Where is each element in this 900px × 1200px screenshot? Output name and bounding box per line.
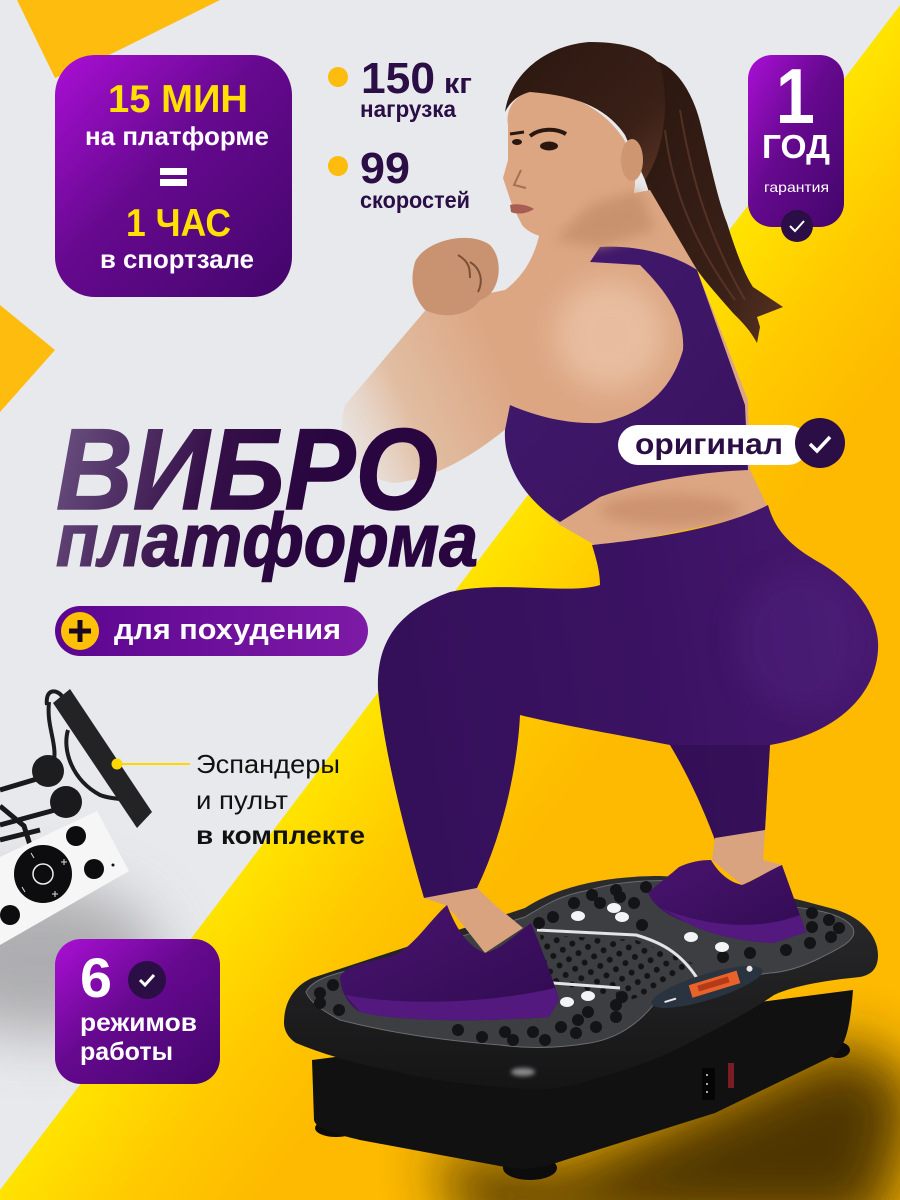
card: 15 min equals 1 hour: в спортзале — [100, 244, 254, 274]
card: 6 work modes — [55, 939, 220, 1084]
control display — [648, 958, 766, 1016]
stat: 99 speeds — [328, 144, 470, 213]
neck shadow — [555, 190, 655, 247]
lower back shading — [600, 494, 740, 526]
card: 6 work modes: работы — [80, 1038, 173, 1066]
accessories: expander and remote — [0, 689, 152, 945]
glute highlight — [754, 602, 826, 684]
head and face — [503, 92, 635, 244]
white stripes — [537, 930, 697, 988]
stat: 150 kg load: 150 — [361, 54, 435, 103]
woman — [340, 42, 878, 1020]
original label: оригинал — [635, 428, 783, 461]
platform base — [312, 990, 853, 1169]
icon: seal check — [781, 210, 813, 242]
stat: 150 kg load — [328, 54, 472, 122]
stat: 99 speeds: 99 — [360, 144, 410, 193]
card: 15 min equals 1 hour: 1 ЧАС — [126, 202, 231, 245]
face features — [510, 130, 566, 214]
callout: expanders and remote included: Эспандеры — [196, 749, 340, 779]
icon: plus — [61, 612, 99, 650]
fist — [412, 238, 499, 315]
ear — [621, 139, 643, 181]
white massage balls — [560, 903, 729, 1007]
icon: white remote control — [0, 811, 129, 945]
ponytail — [645, 60, 783, 343]
left shoe — [340, 905, 559, 1020]
platform rim — [284, 876, 878, 1089]
warranty badge: 1 — [776, 52, 813, 140]
warranty badge: гарантия — [764, 179, 829, 195]
platform feet — [315, 1042, 850, 1180]
callout: expanders and remote included: в комплекте — [196, 822, 365, 850]
vibration platform — [284, 876, 878, 1180]
stat: 99 speeds: скоростей — [360, 187, 470, 213]
stat: 150 kg load: кг — [444, 68, 472, 100]
back calf shading — [670, 745, 770, 841]
icon: check circle — [795, 418, 845, 468]
pill: for weight loss: для похудения — [114, 614, 341, 646]
pill: for weight loss — [55, 606, 368, 656]
sports bra — [505, 247, 748, 522]
card: 6 work modes: 6 — [80, 946, 112, 1009]
callout: expanders and remote included — [112, 749, 365, 850]
hair on head — [505, 42, 665, 180]
callout: expanders and remote included: и пульт — [196, 785, 288, 815]
back highlight — [555, 280, 665, 390]
platform top surface — [306, 881, 854, 1047]
original label — [618, 418, 845, 468]
title: платформа — [56, 498, 478, 582]
stat: 150 kg load: нагрузка — [360, 96, 456, 122]
warranty badge: ГОД — [762, 128, 830, 165]
card: 15 min equals 1 hour — [55, 55, 292, 297]
card: 6 work modes: режимов — [80, 1009, 197, 1037]
icon: check circle — [128, 961, 166, 999]
back skin and arm — [342, 190, 770, 548]
card: 15 min equals 1 hour: 15 МИН — [108, 78, 248, 121]
warranty badge — [748, 52, 844, 242]
rim gloss — [511, 1068, 535, 1076]
title: ВИБРО — [56, 406, 438, 534]
power switch panel — [702, 1063, 734, 1100]
right shoe — [648, 860, 806, 943]
massage nubs — [314, 881, 845, 1046]
card: 15 min equals 1 hour: на платформе — [85, 121, 269, 151]
icon: expander handle and cables — [0, 689, 152, 845]
ankles — [424, 830, 782, 953]
massage mesh — [540, 935, 697, 1000]
leggings — [378, 505, 878, 898]
